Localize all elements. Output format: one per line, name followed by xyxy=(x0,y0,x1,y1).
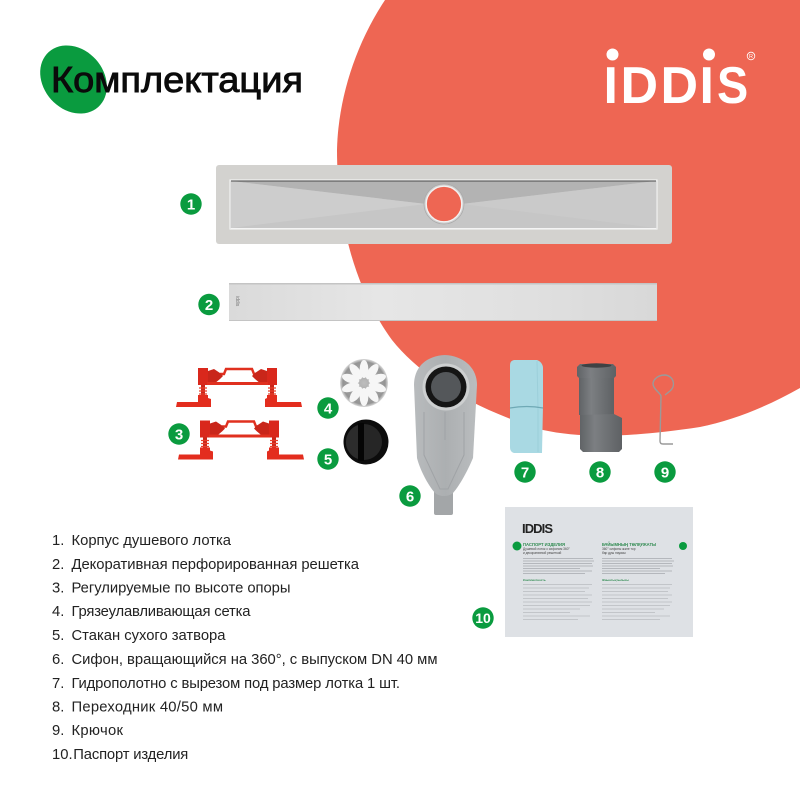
coral background shape xyxy=(337,0,800,436)
product 10: passport document: БҰЙЫМНЫҢ ТӨЛҚҰЖАТЫ xyxy=(602,542,656,547)
parts list: 8. xyxy=(52,700,64,716)
parts list: 6. xyxy=(52,652,64,668)
parts list: 5. xyxy=(52,628,64,644)
product 8: adapter xyxy=(577,363,622,452)
product 1: tray body xyxy=(216,165,672,244)
product 2: grate xyxy=(229,283,657,321)
product 10: passport document: Душевой лоток с сифоном 360° xyxy=(523,547,571,551)
badge 2: 2 xyxy=(205,297,213,314)
title text: Комплектация xyxy=(51,59,303,100)
parts list: Переходник 40/50 мм xyxy=(72,700,223,716)
badge 4: 4 xyxy=(324,400,333,418)
badge 8 xyxy=(589,461,611,483)
badge 8: 8 xyxy=(596,464,604,482)
product 6: siphon xyxy=(414,355,477,515)
parts list: Грязеулавливающая сетка xyxy=(72,604,251,620)
badge 7 xyxy=(514,461,536,483)
product 10: passport document: и декоративной решеткой xyxy=(523,551,562,555)
badge 7: 7 xyxy=(521,464,529,482)
parts list: Паспорт изделия xyxy=(73,747,188,763)
badge 10 xyxy=(472,607,494,629)
badge 4 xyxy=(317,397,339,419)
parts list: 4. xyxy=(52,604,64,620)
parts list: Декоративная перфорированная решетка xyxy=(72,557,360,573)
product 10: passport document xyxy=(505,507,693,637)
badge 3: 3 xyxy=(175,426,183,444)
logo: IDDIS xyxy=(604,48,755,115)
logo: IDDIS: R xyxy=(749,54,753,60)
product 10: passport document: Жиынтықтылығы xyxy=(601,578,629,582)
product 7: hydro cloth xyxy=(510,360,543,453)
product 5: dry trap cup xyxy=(344,420,388,464)
badge 5 xyxy=(317,448,339,470)
product 10: passport document: Комплектность xyxy=(523,578,546,582)
badge 5: 5 xyxy=(324,452,332,468)
product 10: passport document: 360° сифоны және тор xyxy=(602,547,636,551)
parts list: Сифон, вращающийся на 360°, с выпуском DN 40 мм xyxy=(72,652,438,668)
parts list xyxy=(52,533,438,763)
badge 6 xyxy=(399,485,421,507)
product 9: hook xyxy=(653,375,673,444)
parts list: 7. xyxy=(52,676,64,692)
parts list: 9. xyxy=(52,723,64,739)
parts list: 10. xyxy=(52,747,73,763)
parts list: 1. xyxy=(52,533,64,549)
product 10: passport document: IDDIS xyxy=(522,521,553,536)
parts list: Стакан сухого затвора xyxy=(72,628,226,644)
parts list: Регулируемые по высоте опоры xyxy=(72,580,290,596)
logo: IDDIS: S xyxy=(717,57,748,115)
badge 1 xyxy=(180,193,202,215)
badge 2 xyxy=(198,294,220,315)
parts list: Крючок xyxy=(72,723,124,739)
title xyxy=(26,32,303,127)
product 10: passport document: ПАСПОРТ ИЗДЕЛИЯ xyxy=(523,542,565,547)
parts list: 3. xyxy=(52,580,64,596)
logo: IDDIS: IDDI xyxy=(604,57,714,115)
product 4: strainer xyxy=(340,359,388,407)
parts list: Корпус душевого лотка xyxy=(72,533,232,549)
badge 9: 9 xyxy=(661,464,669,482)
parts list: Гидрополотно с вырезом под размер лотка 1 шт. xyxy=(72,676,400,692)
title blob xyxy=(26,32,121,127)
badge 9 xyxy=(654,461,676,483)
parts list: 2. xyxy=(52,557,64,573)
badge 6: 6 xyxy=(406,488,414,506)
badge 1: 1 xyxy=(187,196,195,214)
badge 10: 10 xyxy=(475,610,491,626)
product 3: height-adjustable supports xyxy=(176,368,304,460)
product 10: passport document: бар душ науасы xyxy=(602,551,627,555)
badge 3 xyxy=(168,423,190,445)
product 2: grate: iddis xyxy=(234,296,240,307)
